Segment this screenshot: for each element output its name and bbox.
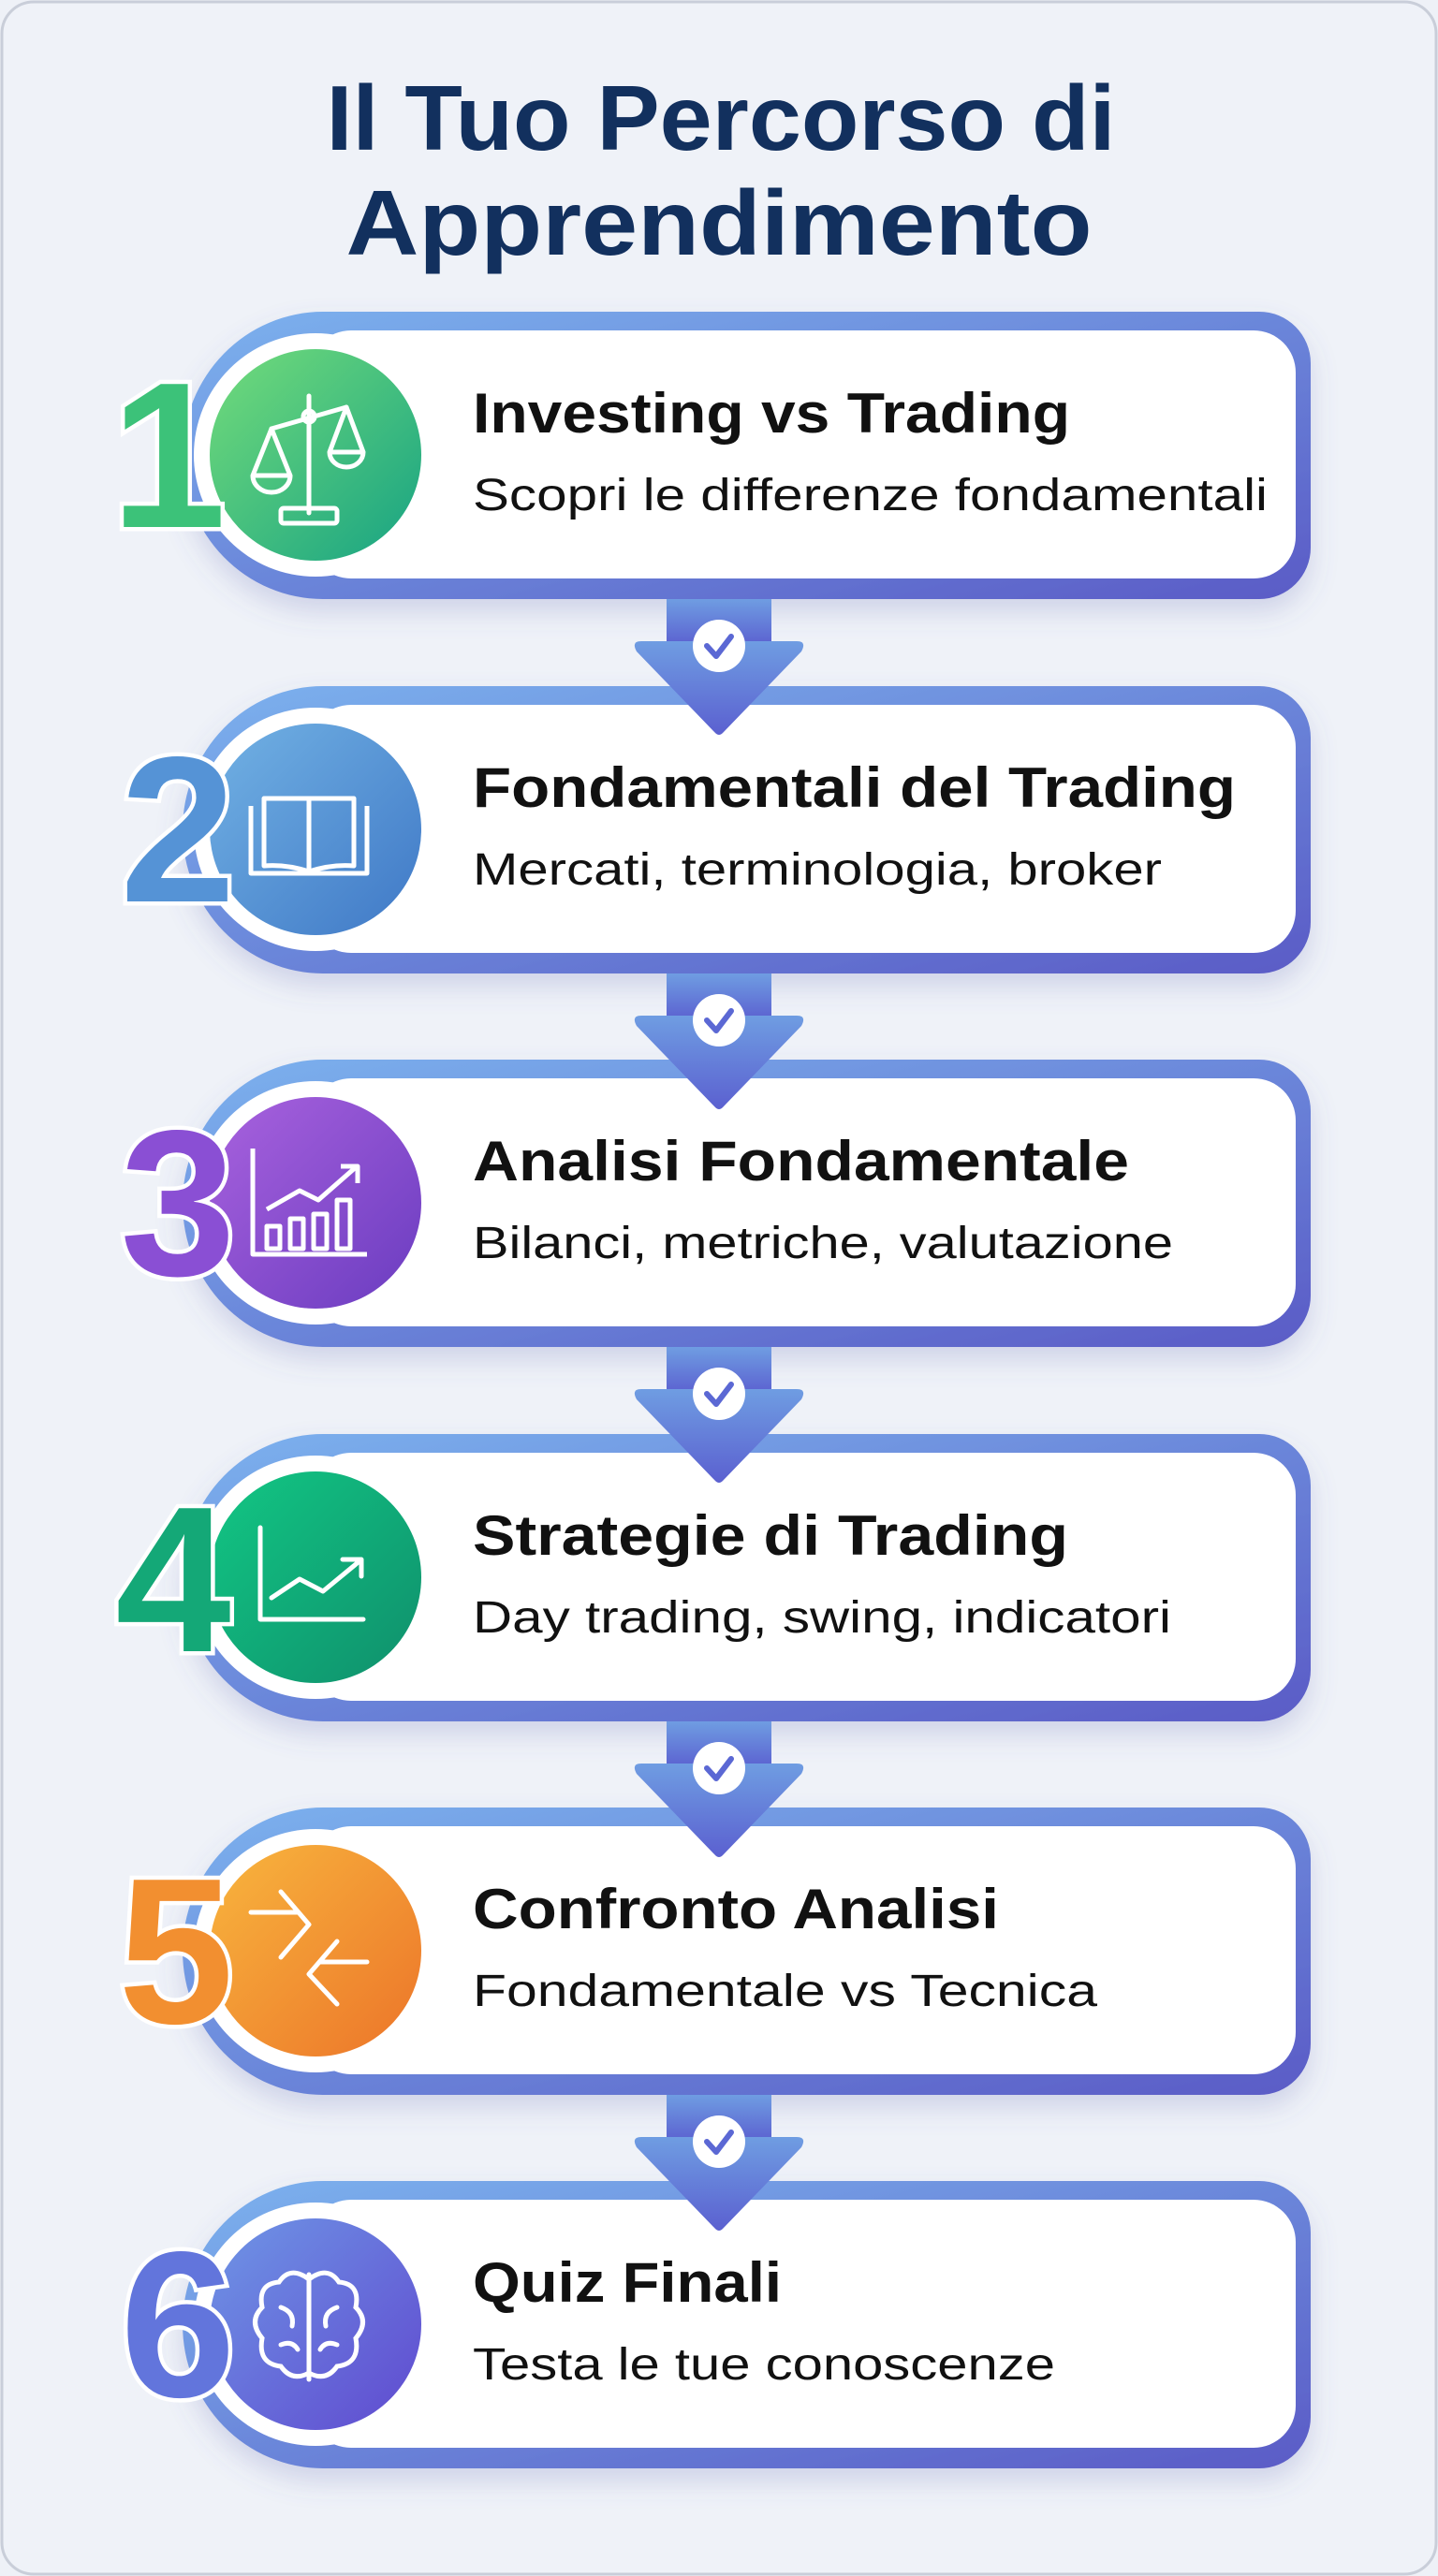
step 2 card: Fondamentali del Trading <box>473 756 1236 819</box>
step 3 card: Bilanci, metriche, valutazione <box>473 1219 1173 1268</box>
title: Il Tuo Percorso di <box>326 66 1116 169</box>
icon: bar chart with trend <box>253 1149 367 1254</box>
number 4: 4 <box>115 1464 231 1696</box>
step 6 card: Quiz Finali <box>473 2251 782 2314</box>
step 4 card: Day trading, swing, indicatori <box>473 1593 1171 1643</box>
icon: converging arrows <box>251 1892 367 2004</box>
step 4 card: Strategie di Trading <box>473 1504 1068 1567</box>
step 3 card <box>120 1060 1311 1347</box>
step 6 card: Testa le tue conoscenze <box>473 2340 1055 2390</box>
step 4 card <box>115 1434 1311 1721</box>
step 1 card: Investing vs Trading <box>473 382 1070 445</box>
step 5 card <box>118 1808 1311 2095</box>
number 5: 5 <box>118 1836 234 2068</box>
number 1: 1 <box>110 340 227 572</box>
step 2 card: Mercati, terminologia, broker <box>473 845 1162 895</box>
icon: line chart <box>260 1528 363 1619</box>
number 6: 6 <box>120 2209 236 2441</box>
icon: brain <box>255 2273 363 2379</box>
step 5 card: Confronto Analisi <box>473 1878 999 1940</box>
number 2: 2 <box>120 714 236 946</box>
step 2 card <box>120 686 1311 973</box>
number 3: 3 <box>120 1088 236 1320</box>
step 1 card <box>110 312 1311 599</box>
title <box>326 66 1116 274</box>
arrow 4 to 5 <box>635 1721 803 1857</box>
arrow 1 to 2 <box>635 599 803 735</box>
icon: scales <box>253 396 363 523</box>
title: Apprendimento <box>346 171 1092 274</box>
step 5 card: Fondamentale vs Tecnica <box>473 1967 1097 2016</box>
arrow 3 to 4 <box>635 1347 803 1483</box>
icon: book <box>251 798 367 873</box>
step 6 card <box>120 2181 1311 2468</box>
arrow 5 to 6 <box>635 2095 803 2231</box>
arrow 2 to 3 <box>635 973 803 1109</box>
step 1 card: Scopri le differenze fondamentali <box>473 471 1268 520</box>
step 3 card: Analisi Fondamentale <box>473 1130 1129 1193</box>
